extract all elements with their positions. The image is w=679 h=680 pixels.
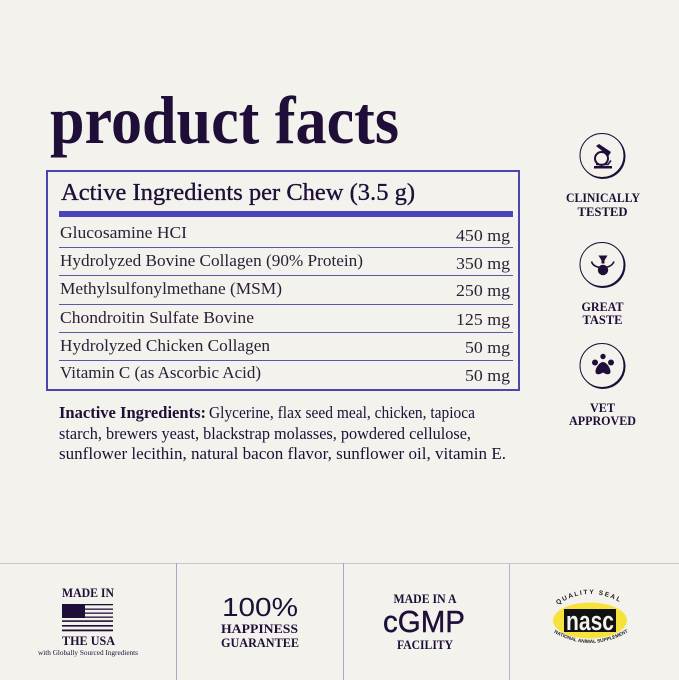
label: clinically tested bbox=[566, 191, 640, 219]
label: clinically tested: TESTED bbox=[578, 205, 628, 219]
row: glucosamine: Glucosamine HCI bbox=[60, 223, 187, 242]
row: chicken collagen: 50 mg bbox=[465, 338, 511, 357]
row: vitamin C: 50 mg bbox=[465, 366, 511, 385]
label: great taste: TASTE bbox=[582, 313, 622, 327]
bottom strip dividers bbox=[0, 563, 679, 680]
row: vitamin C: Vitamin C (as Ascorbic Acid) bbox=[60, 363, 261, 382]
panel: active ingredients table bbox=[47, 171, 519, 390]
label: vet approved: VET bbox=[590, 401, 616, 415]
label: vet approved: APPROVED bbox=[569, 414, 636, 428]
badge: 100% happiness guarantee: GUARANTEE bbox=[221, 635, 299, 650]
inactive ingredients text: sunflower lecithin, natural bacon flavor, sunflower oil, vitamin E. bbox=[59, 444, 506, 463]
badge: made in the USA: THE USA bbox=[62, 633, 116, 648]
label: great taste: GREAT bbox=[582, 300, 624, 314]
badge: NASC quality seal: nasc bbox=[566, 606, 614, 636]
badge: 100% happiness guarantee bbox=[221, 592, 299, 650]
row: chicken collagen: Hydrolyzed Chicken Collagen bbox=[60, 336, 271, 355]
row: glucosamine: 450 mg bbox=[456, 226, 511, 245]
inactive ingredients text bbox=[59, 403, 506, 463]
title: product facts bbox=[50, 82, 399, 158]
badge: cGMP facility: MADE IN A bbox=[394, 592, 456, 606]
row: bovine collagen: 350 mg bbox=[456, 254, 511, 273]
row: chondroitin: Chondroitin Sulfate Bovine bbox=[60, 308, 254, 327]
heading bar bbox=[59, 211, 513, 217]
badge: cGMP facility: FACILITY bbox=[397, 638, 453, 652]
badge: made in the USA: MADE IN bbox=[62, 586, 114, 600]
row: chondroitin: 125 mg bbox=[456, 310, 511, 329]
row: vitamin C bbox=[60, 363, 511, 385]
badge: cGMP facility bbox=[383, 592, 465, 652]
icon: dog tongue bbox=[580, 242, 626, 288]
badge: made in the USA: with Globally Sourced Ingredients bbox=[38, 648, 138, 657]
icon: microscope bbox=[580, 134, 626, 179]
badge: cGMP facility: cGMP bbox=[383, 604, 465, 639]
row: chicken collagen bbox=[60, 336, 511, 357]
badge: 100% happiness guarantee: 100% bbox=[222, 592, 298, 622]
row: MSM bbox=[60, 279, 511, 300]
row: bovine collagen: Hydrolyzed Bovine Collagen (90% Protein) bbox=[60, 251, 363, 270]
inactive ingredients text: Glycerine, flax seed meal, chicken, tapioca bbox=[209, 403, 475, 422]
badge: NASC quality seal: NATIONAL ANIMAL SUPPLEMENT COUNCIL bbox=[554, 629, 628, 643]
label: great taste bbox=[582, 300, 624, 327]
label: vet approved bbox=[569, 401, 636, 428]
row: chondroitin bbox=[60, 308, 511, 329]
inactive ingredients text: Inactive Ingredients: bbox=[59, 403, 206, 422]
badge: made in the USA bbox=[38, 586, 138, 657]
badge: NASC quality seal: QUALITY SEAL bbox=[556, 589, 620, 604]
badge: 100% happiness guarantee: HAPPINESS bbox=[221, 621, 298, 636]
label: clinically tested: CLINICALLY bbox=[566, 191, 640, 205]
inactive ingredients text: starch, brewers yeast, blackstrap molasses, powdered cellulose, bbox=[59, 424, 471, 443]
icon: flag bbox=[62, 604, 113, 631]
icon: paw bbox=[580, 344, 626, 389]
row: bovine collagen bbox=[60, 251, 511, 273]
row: glucosamine bbox=[60, 223, 511, 245]
table heading: Active Ingredients per Chew (3.5 g) bbox=[61, 180, 415, 206]
row: MSM: Methylsulfonylmethane (MSM) bbox=[60, 279, 282, 298]
row: MSM: 250 mg bbox=[456, 281, 511, 300]
